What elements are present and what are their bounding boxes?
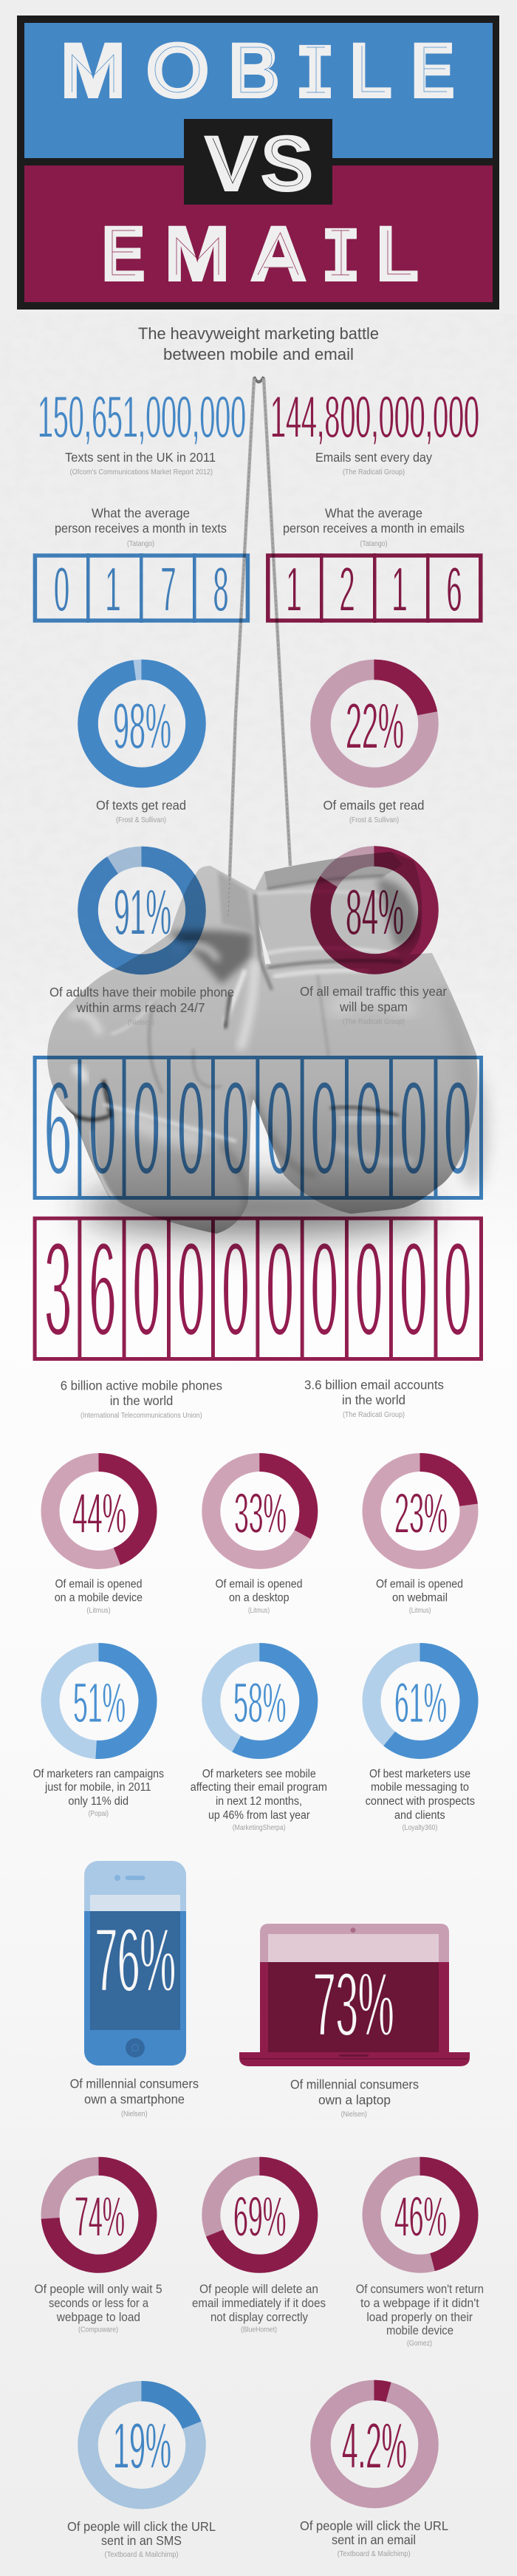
text: webmail opens: (Litmus) [409,1606,431,1615]
text: best marketers: connect with prospects [366,1795,475,1808]
boxing glove rope: right strand [254,377,290,866]
text: average emails: What the average [325,505,422,520]
text: average texts: (Tatango) [127,539,154,548]
donut: 4.2% email clicks [321,2391,428,2498]
counter: 6 billion phones: 0 [89,1052,116,1203]
boxing gloves photo [47,852,487,1235]
donut: 51% mobile campaigns [50,1652,148,1749]
counter: 6 billion phones: 0 [222,1052,250,1203]
text: emails get read: Of emails get read [323,798,424,813]
text: average emails: person receives a month in emails [283,521,465,536]
donut: 61% best marketers: 61% [394,1671,447,1735]
counter: 3.6 billion emails: 3 [44,1213,72,1364]
text: delete email [192,2283,326,2334]
heading: EMAIL [101,211,419,304]
text: email clicks: sent in an email [332,2532,416,2547]
counter: emails per month [268,553,481,625]
counter: 6 billion phones: 0 [400,1052,427,1203]
icon: laptop 73% [239,1924,470,2066]
counter: emails per month: 6 [446,555,462,625]
title banner [17,16,499,310]
text: own a smartphone [70,2077,199,2119]
text: best marketers: Of best marketers use [369,1768,470,1780]
donut: 74% wait 5 seconds: 74% [75,2185,125,2249]
donut: 23% webmail opens [372,1463,469,1560]
donut: 4.2% email clicks: 4.2% [342,2409,407,2482]
text: wait 5 seconds [34,2283,162,2334]
donut: 22% emails read: 22% [346,689,404,762]
text: best marketers: (Loyalty360) [403,1823,437,1832]
heading: EMAIL: E [101,211,145,297]
heading: MOBILE: O [145,28,210,114]
donut: 22% emails read [321,669,428,777]
text: wait 5 seconds: seconds or less for a [49,2297,149,2310]
text: wait 5 seconds: (Compuware) [78,2326,118,2334]
stat: emails sent: (The Radicati Group) [343,468,405,476]
heading: VS [205,121,313,207]
icon: laptop 73%: 73% [313,1955,394,2056]
stat: emails sent: Emails sent every day [315,450,432,465]
text: won't return [356,2283,484,2348]
icon: smartphone 76% [84,1861,186,2066]
donut: 51% mobile campaigns: 51% [73,1671,126,1735]
counter: texts per month: 7 [161,555,176,625]
donut: 61% best marketers [372,1652,469,1749]
counter: 3.6 billion emails: 6 [89,1213,116,1364]
donut: 98% texts read [88,669,196,777]
text: desktop opens: on a desktop [229,1592,290,1605]
text: email spam: (The Radicati Group) [343,1017,405,1026]
text: email spam [300,984,447,1026]
text: mobile opens: (Litmus) [86,1606,111,1615]
text: SMS clicks: Of people will click the URL [67,2519,216,2534]
donut: 58% email program: 58% [233,1671,287,1735]
stat: texts sent [38,384,246,476]
text: 6 billion phones: (International Telecommunications Union) [81,1411,202,1420]
counter: 3.6 billion emails: 0 [400,1213,427,1364]
text: 3.6 billion emails: in the world [342,1393,405,1407]
counter: 6 billion phones: 0 [355,1052,383,1203]
text: own a smartphone: (Nielsen) [121,2110,148,2119]
counter: texts per month: 1 [105,555,121,625]
text: wait 5 seconds: Of people will only wait 5 [34,2283,162,2296]
counter: 6 billion phones [35,1052,482,1203]
heading: MOBILE: M [61,28,126,114]
text: mobile campaigns: (Popai) [89,1809,109,1818]
counter: texts per month: 8 [213,555,229,625]
boxing glove rope: left strand [228,378,254,916]
donut: 44% mobile opens: 44% [72,1482,126,1545]
text: own a smartphone: own a smartphone [84,2092,185,2107]
counter: 6 billion phones: 6 [44,1052,72,1203]
donut: 91% arms reach [88,857,196,965]
heading: MOBILE: I [295,33,335,121]
subtitle: between mobile and email [163,345,354,363]
donut: 23% webmail opens: 23% [394,1482,448,1545]
heading: EMAIL: M [164,211,230,297]
heading: EMAIL: L [376,211,419,297]
text: email program: in next 12 months, [216,1795,302,1808]
donut: 69% delete email [211,2166,309,2264]
text: email spam: will be spam [339,1000,408,1014]
text: 150,651,000,000 [38,384,246,451]
counter: 3.6 billion emails: 0 [133,1213,160,1364]
text: average texts: person receives a month in texts [55,521,227,536]
text: texts get read: Of texts get read [96,798,186,813]
text: desktop opens: Of email is opened [216,1578,303,1591]
stat: emails sent [270,384,479,476]
heading: EMAIL: I [321,216,360,304]
heading: VS: V [205,121,257,207]
counter: texts per month: 0 [54,555,69,625]
text: won't return: load properly on their [366,2311,473,2324]
donut: 19% SMS clicks [88,2391,196,2499]
text: mobile campaigns: just for mobile, in 2011 [44,1781,151,1794]
text: average emails [283,505,465,548]
text: email spam: Of all email traffic this year [300,984,447,999]
text: mobile opens: on a mobile device [55,1592,143,1605]
donut: 69% delete email: 69% [233,2185,287,2249]
donut: 74% wait 5 seconds [50,2166,148,2264]
text: best marketers: and clients [394,1809,445,1822]
counter: 6 billion phones: 0 [311,1052,338,1203]
text: delete email: email immediately if it does [192,2297,326,2310]
text: mobile campaigns: Of marketers ran campaigns [33,1768,164,1780]
donut: 84% spam [321,856,428,964]
text: best marketers: mobile messaging to [371,1781,469,1794]
heading: MOBILE: B [228,28,280,114]
text: mobile campaigns [33,1768,164,1818]
stat: texts sent: (Ofcom's Communications Market Report 2012) [70,468,213,476]
panel: email maroon [24,165,493,302]
text: email program [191,1768,327,1832]
icon: smartphone 76%: 76% [95,1910,176,2012]
text: average emails: (Tatango) [360,539,387,548]
text: average texts: What the average [92,505,190,520]
text: best marketers [366,1768,475,1832]
text: own a laptop: (Nielsen) [341,2110,367,2119]
text: texts get read: (Frost & Sullivan) [116,816,166,824]
counter: 3.6 billion emails: 0 [266,1213,294,1364]
glove shading and creases [64,852,467,1219]
text: adults mobile reach: (Nielsen) [128,1018,154,1027]
counter: 6 billion phones: 0 [266,1052,294,1203]
text: delete email: not display correctly [210,2311,309,2324]
text: webmail opens [376,1578,463,1615]
text: 6 billion phones: in the world [110,1393,173,1408]
subtitle [138,324,379,363]
text: webmail opens: Of email is opened [376,1578,463,1591]
donut: 58% email program [211,1652,309,1749]
counter: 3.6 billion emails: 0 [177,1213,205,1364]
donut: 46% won't return: 46% [394,2185,447,2249]
panel: mobile blue [24,23,493,158]
text: won't return: mobile device [386,2324,453,2337]
counter: 6 billion phones: 0 [444,1052,471,1203]
text: mobile campaigns: only 11% did [68,1795,129,1808]
stat: texts sent: Texts sent in the UK in 2011 [65,450,216,465]
text: own a smartphone: Of millennial consumers [70,2077,199,2091]
right glove cuff [255,852,422,971]
text: email program: Of marketers see mobile [202,1768,316,1780]
panel: vs box [184,119,332,205]
donut: 33% desktop opens: 33% [234,1482,287,1545]
subtitle: The heavyweight marketing battle [138,324,379,343]
text: emails get read: (Frost & Sullivan) [349,816,399,824]
counter: emails per month: 1 [287,555,301,625]
text: delete email: (BlueHornet) [241,2326,277,2334]
counter: emails per month: 2 [340,555,355,625]
text: mobile opens [55,1578,143,1615]
donut: 33% desktop opens [211,1463,309,1560]
heading: MOBILE [61,28,455,121]
text: SMS clicks: sent in an SMS [101,2533,182,2548]
donut: 19% SMS clicks: 19% [113,2409,171,2482]
counter: texts per month [35,553,247,625]
counter: 3.6 billion emails: 0 [444,1213,471,1364]
donut: 91% arms reach: 91% [114,875,171,949]
text: email program: (MarketingSherpa) [233,1823,286,1832]
text: emails get read [323,798,424,824]
donut: 46% won't return [372,2166,469,2264]
text: 6 billion phones: 6 billion active mobile phones [61,1378,222,1393]
right glove [250,953,477,1214]
left glove [47,866,270,1234]
heading: MOBILE: L [349,28,392,114]
text: adults mobile reach [49,985,234,1027]
heading: VS: S [261,121,313,207]
counter: 3.6 billion emails [35,1213,482,1364]
counter: 3.6 billion emails: 0 [222,1213,250,1364]
donut: 84% spam: 84% [346,875,404,949]
text: email clicks: (Textboard & Mailchimp) [338,2549,411,2558]
counter: 3.6 billion emails: 0 [311,1213,338,1364]
text: average texts [55,505,227,548]
counter: 6 billion phones: 0 [133,1052,160,1203]
text: SMS clicks: (Textboard & Mailchimp) [105,2550,179,2559]
text: texts get read [96,798,186,824]
counter: emails per month: 1 [391,555,408,625]
counter: 6 billion phones: 0 [177,1052,205,1203]
heading: MOBILE: E [411,28,455,114]
text: webmail opens: on webmail [392,1592,448,1605]
text: 3.6 billion emails: 3.6 billion email accounts [304,1378,444,1393]
text: desktop opens [216,1578,303,1615]
text: own a laptop: Of millennial consumers [290,2077,419,2092]
text: won't return: (Gomez) [407,2339,432,2348]
text: own a laptop: own a laptop [318,2093,391,2108]
text: email program: up 46% from last year [208,1809,310,1822]
text: mobile opens: Of email is opened [55,1578,142,1591]
text: adults mobile reach: within arms reach 24/7 [76,1000,205,1015]
text: 3.6 billion emails [304,1378,444,1419]
text: adults mobile reach: Of adults have their mobile phone [49,985,234,1000]
text: SMS clicks [67,2519,216,2559]
text: 3.6 billion emails: (The Radicati Group) [343,1410,405,1419]
donut: 44% mobile opens [50,1463,148,1560]
text: email program: affecting their email program [191,1781,327,1794]
text: 6 billion phones [61,1378,222,1420]
text: own a laptop [290,2077,419,2119]
text: desktop opens: (Litmus) [248,1606,270,1615]
text: email clicks: Of people will click the URL [300,2518,448,2533]
text: won't return: Of consumers won't return [356,2283,484,2296]
counter: 3.6 billion emails: 0 [355,1213,383,1364]
text: delete email: Of people will delete an [199,2283,318,2296]
heading: EMAIL: A [250,211,307,297]
text: email clicks [300,2518,448,2558]
text: won't return: to a webpage if it didn't [360,2297,479,2310]
donut: 98% texts read: 98% [113,689,171,762]
text: wait 5 seconds: webpage to load [56,2311,140,2324]
